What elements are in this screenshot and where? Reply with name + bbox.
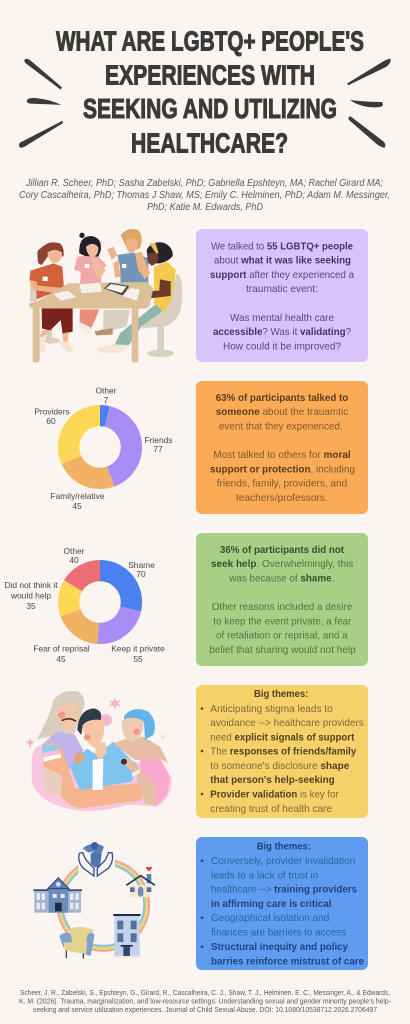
panel: big themes, support: that person's help-seeking	[210, 775, 335, 786]
person right: blue hair, pink top	[113, 709, 170, 807]
donut chart: who participants talked to: Family/relative	[51, 491, 105, 501]
panel: who we talked to: support after they experienced a	[210, 270, 354, 281]
icon: armchair	[59, 927, 94, 959]
stars	[109, 697, 121, 709]
citation	[19, 988, 391, 1014]
panel: big themes, barriers: leads to a lack of trust in	[211, 870, 319, 881]
panel: big themes, support: Big themes:	[254, 689, 308, 700]
panel: big themes, support: Provider validation is key for	[210, 790, 339, 800]
panel: why no help was sought: seek help. Overwhelmingly, this	[211, 559, 353, 570]
panel: big themes, support: creating trust of health care	[210, 804, 332, 815]
panel: big themes, barriers	[196, 837, 368, 970]
panel: who they talked to	[196, 381, 368, 514]
panel: who we talked to	[196, 229, 368, 362]
illustration: three friends embracing	[26, 691, 172, 811]
donut chart: who participants talked to	[34, 386, 172, 511]
panel: who we talked to: Was mental health care	[230, 313, 334, 324]
donut chart: why participants did not seek help	[4, 546, 165, 664]
panel: big themes, barriers: healthcare --> training providers	[211, 885, 357, 896]
panel: who they talked to: 63% of participants talked to	[216, 393, 348, 404]
authors: Jillian R. Scheer, PhD; Sasha Zabelski, PhD; Gabriella Epshteyn, MA; Rachel Girard MA;	[25, 178, 383, 189]
pink wash	[32, 746, 172, 811]
brush marks left	[19, 59, 63, 148]
donut chart: who participants talked to: 77	[153, 444, 163, 454]
panel: who we talked to: How could it be improved?	[223, 341, 341, 352]
panel: big themes, barriers: finances are barriers to access	[211, 928, 346, 938]
person middle: blue jacket	[70, 708, 138, 790]
panel: big themes, barriers: Structural inequity and policy	[211, 942, 348, 953]
panel: who they talked to: Most talked to others for moral	[213, 450, 351, 461]
panel: why no help was sought: belief that sharing would not help	[209, 645, 356, 656]
donut chart: who participants talked to: 7	[104, 395, 109, 405]
title: EXPERIENCES WITH	[105, 60, 315, 90]
donut chart: why participants did not seek help: Other	[64, 546, 85, 556]
panel: why no help was sought	[196, 533, 368, 666]
donut chart: who participants talked to: Providers	[34, 407, 70, 417]
illustration: rainbow ring linking care settings	[33, 842, 155, 959]
donut chart: why participants did not seek help: 55	[133, 654, 143, 664]
person left: long grey hair, lilac top	[37, 691, 145, 808]
panel: big themes, support	[196, 685, 368, 818]
panel: who we talked to: traumatic event:	[246, 284, 318, 295]
title: HEALTHCARE?	[131, 128, 288, 158]
panel: big themes, barriers: Big themes:	[257, 841, 311, 852]
icon: school building	[33, 878, 82, 913]
donut chart: why participants did not seek help: would help	[10, 591, 51, 601]
donut chart: who participants talked to: Friends	[145, 435, 172, 445]
donut chart: why participants did not seek help: 35	[26, 601, 36, 611]
panel: big themes, barriers: Geographical isolation and	[211, 913, 330, 924]
panel: who they talked to: teachers/professors.	[236, 493, 328, 504]
rainbow ring	[57, 859, 149, 951]
panel: why no help was sought: 36% of participants did not	[220, 545, 345, 556]
authors: PhD; Katie M. Edwards, PhD	[147, 202, 263, 213]
person yellow	[97, 242, 176, 353]
citation: seeking and service utilization experiences. Journal of Child Sexual Abuse. DOI: 10.1080/10538712.2026.2706497	[33, 1005, 377, 1014]
donut chart: why participants did not seek help: Did not think it	[4, 580, 58, 590]
panel: big themes, barriers: barries reinforce mistrust of care	[211, 956, 364, 967]
icon: hands holding person	[78, 842, 115, 878]
brush marks right	[347, 59, 391, 148]
donut chart: why participants did not seek help: 45	[56, 654, 66, 664]
donut chart: why participants did not seek help: 70	[136, 569, 146, 579]
panel: big themes, barriers: in affirming care is critical	[211, 899, 331, 910]
title	[56, 26, 364, 158]
panel: who we talked to: about what it was like seeking	[214, 256, 351, 267]
panel: big themes, support: The responses of friends/family	[210, 747, 357, 758]
panel: who they talked to: event that they experienced.	[219, 421, 343, 432]
icon: apartment block	[113, 914, 141, 958]
panel: who we talked to: We talked to 55 LGBTQ+ people	[211, 241, 353, 252]
panel: big themes, support: to someone's disclosure shape	[210, 761, 350, 772]
icon: house with heart	[126, 867, 155, 897]
chair right	[142, 273, 182, 357]
donut chart: who participants talked to: Other	[96, 386, 117, 396]
panel: who we talked to: accessible? Was it validating?	[213, 327, 351, 338]
table top	[29, 282, 153, 362]
person orange	[29, 242, 80, 353]
person pink	[74, 233, 107, 335]
authors	[19, 178, 390, 213]
donut chart: why participants did not seek help: Fear of reprisal	[33, 644, 90, 654]
panel: why no help was sought: Other reasons included a desire	[212, 602, 353, 613]
panel: big themes, support: Anticipating stigma leads to	[210, 704, 333, 715]
panel: why no help was sought: was because of shame.	[228, 573, 334, 584]
person blue	[95, 229, 150, 335]
donut chart: who participants talked to: 60	[46, 416, 56, 426]
donut chart: who participants talked to: 45	[72, 501, 82, 511]
panel: big themes, support: avoidance --> healthcare providers	[210, 718, 364, 729]
panel: who they talked to: support or protection, including	[210, 464, 355, 475]
panel: big themes, support: need explicit signals of support	[210, 732, 355, 743]
panel: who they talked to: someone about the trauamtic	[216, 407, 348, 418]
panel: why no help was sought: to keep the event private, a fear	[213, 616, 352, 627]
chair left	[30, 270, 60, 344]
donut chart: why participants did not seek help: Shame	[128, 560, 155, 570]
panel: why no help was sought: of retaliation or reprisal, and a	[216, 631, 348, 642]
panel: big themes, barriers: Conversely, provider invalidation	[211, 856, 356, 867]
donut chart: why participants did not seek help: Keep it private	[111, 644, 165, 654]
illustration: four people talking around a table	[29, 229, 182, 362]
donut chart: why participants did not seek help: 40	[69, 555, 79, 565]
panel: who they talked to: friends, family, providers, and	[217, 479, 348, 490]
